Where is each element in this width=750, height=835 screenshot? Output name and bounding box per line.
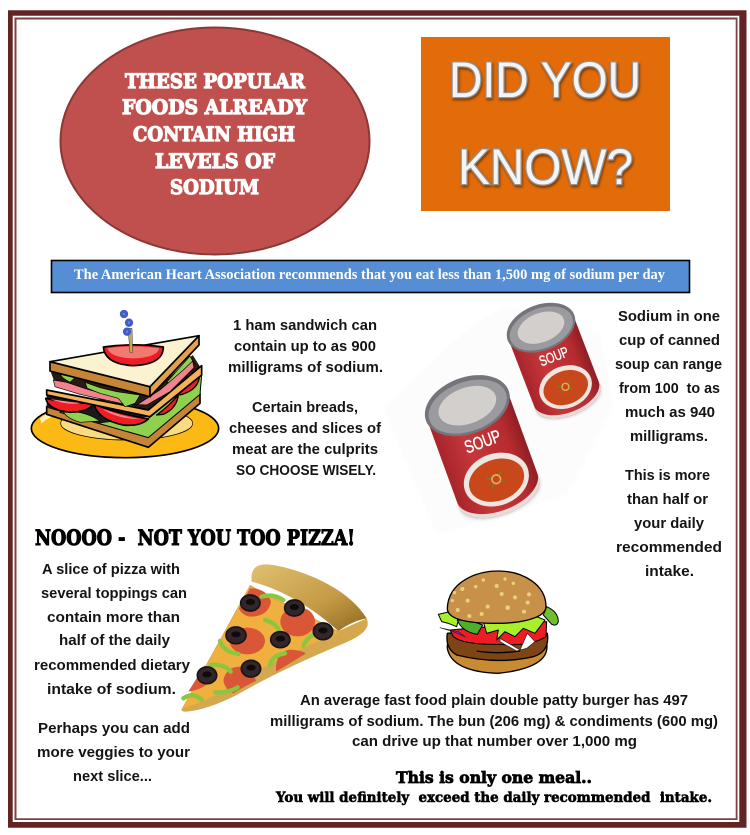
text: canned soup: from 100 to as — [619, 381, 720, 397]
oval callout: popular foods — [60, 28, 370, 254]
oval callout text — [122, 69, 308, 199]
text: pizza slice facts: A slice of pizza with — [42, 562, 180, 578]
small soup can: SOUP — [537, 344, 571, 370]
large soup can: SOUP — [462, 426, 504, 457]
text: burger facts: can drive up that number over 1,000 mg — [352, 734, 637, 750]
text: ham sandwich: 1 ham sandwich can — [233, 318, 377, 334]
text: canned soup: milligrams. — [630, 429, 708, 445]
did you know heading: DID YOU — [449, 52, 641, 108]
text: pizza slice facts: half of the daily — [59, 633, 170, 649]
closing statement: You will definitely exceed the daily recommended intake. — [275, 790, 712, 806]
text: ham sandwich: SO CHOOSE WISELY. — [236, 463, 376, 479]
icon: soup cans — [383, 293, 613, 535]
oval callout text: SODIUM — [170, 175, 259, 199]
heading: pizza: NOOOO - NOT YOU TOO PIZZA! — [35, 525, 355, 550]
did you know heading: KNOW? — [458, 139, 633, 195]
text: canned soup: cup of canned — [619, 333, 720, 349]
text: canned soup: recommended — [616, 540, 722, 556]
text: canned soup: your daily — [634, 516, 704, 532]
large soup can — [416, 364, 548, 529]
text: pizza slice facts: Perhaps you can add — [38, 721, 190, 737]
text: canned soup: intake. — [645, 564, 694, 580]
text: canned soup — [615, 309, 722, 580]
green peppers — [183, 596, 313, 700]
did you know panel — [421, 37, 670, 211]
text: canned soup: much as 940 — [625, 405, 715, 421]
text: canned soup: than half or — [627, 492, 708, 508]
icon: pizza slice — [182, 564, 368, 712]
text: ham sandwich: contain up to as 900 — [234, 339, 376, 355]
text: ham sandwich: Certain breads, — [252, 400, 358, 416]
text: pizza slice facts: several toppings can — [41, 586, 187, 602]
oval callout text: LEVELS OF — [155, 149, 275, 173]
text: pizza slice facts: recommended dietary — [34, 658, 190, 674]
text: canned soup: This is more — [625, 468, 710, 484]
oval callout text: THESE POPULAR — [125, 69, 305, 93]
text: pizza slice facts: intake of sodium. — [47, 682, 176, 698]
text: pizza slice facts: contain more than — [47, 610, 180, 626]
recommendation banner — [52, 260, 690, 292]
oval callout text: CONTAIN HIGH — [133, 122, 295, 146]
text: ham sandwich: meat are the culprits — [232, 442, 378, 458]
olives — [197, 595, 333, 684]
did you know heading — [449, 52, 641, 195]
closing statement — [275, 768, 712, 806]
text: burger facts: milligrams of sodium. The bun (206 mg) & condiments (600 mg) — [270, 714, 718, 730]
text: pizza slice facts: more veggies to your — [37, 745, 190, 761]
recommendation banner: The American Heart Association recommends that you eat less than 1,500 mg of sodium per day — [74, 267, 666, 283]
icon: hamburger — [438, 571, 558, 673]
pepperoni — [188, 588, 315, 693]
text: ham sandwich — [228, 318, 383, 479]
closing statement: This is only one meal.. — [396, 768, 592, 787]
text: canned soup: Sodium in one — [618, 309, 720, 325]
small soup can — [500, 293, 608, 428]
oval callout text: FOODS ALREADY — [122, 95, 308, 119]
text: canned soup: soup can range — [615, 357, 722, 373]
text: pizza slice facts: next slice... — [73, 769, 152, 785]
text: ham sandwich: cheeses and slices of — [229, 421, 381, 437]
text: ham sandwich: milligrams of sodium. — [228, 360, 383, 376]
text: pizza slice facts — [34, 562, 190, 785]
icon: sandwich — [31, 311, 219, 458]
text: burger facts: An average fast food plain double patty burger has 497 — [300, 693, 688, 709]
text: burger facts — [270, 693, 718, 750]
